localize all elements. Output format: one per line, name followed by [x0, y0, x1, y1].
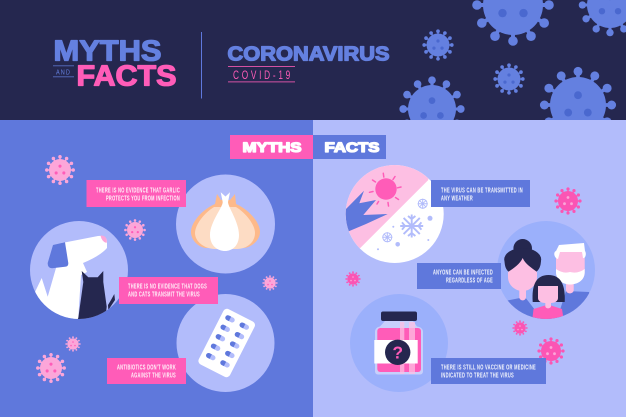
illustration: weather [340, 160, 444, 263]
man [554, 243, 586, 293]
title: myths and facts [53, 36, 176, 92]
cat [76, 271, 107, 322]
virus [45, 155, 75, 185]
virus [36, 353, 66, 383]
pink viruses on myths panel [36, 155, 278, 383]
illustration: garlic [176, 174, 275, 274]
jar glass [375, 321, 423, 374]
heading: coronavirus [228, 44, 390, 82]
callout: age: ANYONE CAN BE INFECTED [433, 270, 493, 276]
illustration: vaccine jar: ? [392, 342, 403, 362]
virus [65, 336, 81, 352]
callout: vaccine [431, 358, 546, 384]
callout: weather: THE VIRUS CAN BE TRANSMITTED IN [441, 188, 523, 194]
virus [512, 320, 528, 336]
nose [100, 236, 107, 243]
woman [504, 239, 541, 300]
virus top right [579, 0, 626, 36]
hot pink viruses on facts panel [345, 187, 582, 365]
label: myths [230, 135, 313, 159]
virus bottom left [399, 76, 465, 142]
panel: myths [0, 120, 313, 417]
illustration: people [498, 221, 595, 319]
illustration: dog and cat [30, 221, 128, 322]
virus small middle [493, 63, 525, 95]
label: facts: FACTS [324, 140, 380, 155]
header divider [201, 32, 202, 98]
callout: weather: ANY WEATHER [441, 196, 473, 202]
illustration: vaccine jar [350, 294, 448, 392]
callout: garlic: PROTECTS YOU FROM INFECTION [106, 196, 180, 202]
ear [48, 242, 68, 268]
label [374, 340, 418, 364]
child [532, 275, 565, 322]
header viruses [399, 0, 626, 143]
heading: coronavirus: COVID-19 [233, 68, 293, 82]
title: myths and facts: AND [56, 68, 71, 76]
virus [124, 219, 146, 241]
callout: dogs and cats [119, 277, 218, 304]
callout: age: REGARDLESS OF AGE [446, 278, 493, 284]
pills [205, 314, 250, 368]
callout: weather [431, 180, 530, 207]
callout: garlic: THERE IS NO EVIDENCE THAT GARLIC [96, 188, 180, 194]
panel: facts [313, 120, 626, 417]
label: myths: MYTHS [242, 140, 302, 155]
callout: age [417, 263, 501, 289]
virus small upper [422, 29, 454, 61]
virus [554, 187, 582, 215]
snowflakes [382, 199, 428, 242]
callout: dogs and cats: THERE IS NO EVIDENCE THAT DOGS [128, 284, 207, 290]
label: facts [313, 135, 386, 159]
title: myths and facts: MYTHS [54, 36, 162, 68]
illustration: pill blister [176, 294, 274, 392]
lid [381, 312, 417, 321]
virus large top [472, 0, 554, 46]
header background [0, 0, 626, 120]
heading: coronavirus: CORONAVIRUS [228, 44, 390, 66]
callout: dogs and cats: AND CATS TRANSMIT THE VIRUS [128, 292, 200, 298]
jar liquid [377, 328, 421, 372]
callout: garlic [86, 180, 186, 207]
sun [375, 178, 397, 200]
virus bottom right [540, 67, 616, 143]
callout: antibiotics: AGAINST THE VIRUS [131, 372, 176, 380]
title: myths and facts: FACTS [76, 60, 176, 92]
callout: antibiotics: ANTIBIOTICS DON'T WORK [117, 364, 176, 372]
virus [262, 275, 278, 291]
palm leaves [345, 191, 388, 232]
callout: antibiotics [107, 358, 186, 384]
dog [30, 236, 107, 322]
callout: vaccine: THERE IS STILL NO VACCINE OR MEDICINE [441, 364, 536, 372]
virus [345, 271, 361, 287]
virus [537, 337, 565, 365]
callout: vaccine: INDICATED TO TREAT THE VIRUS [441, 372, 514, 380]
